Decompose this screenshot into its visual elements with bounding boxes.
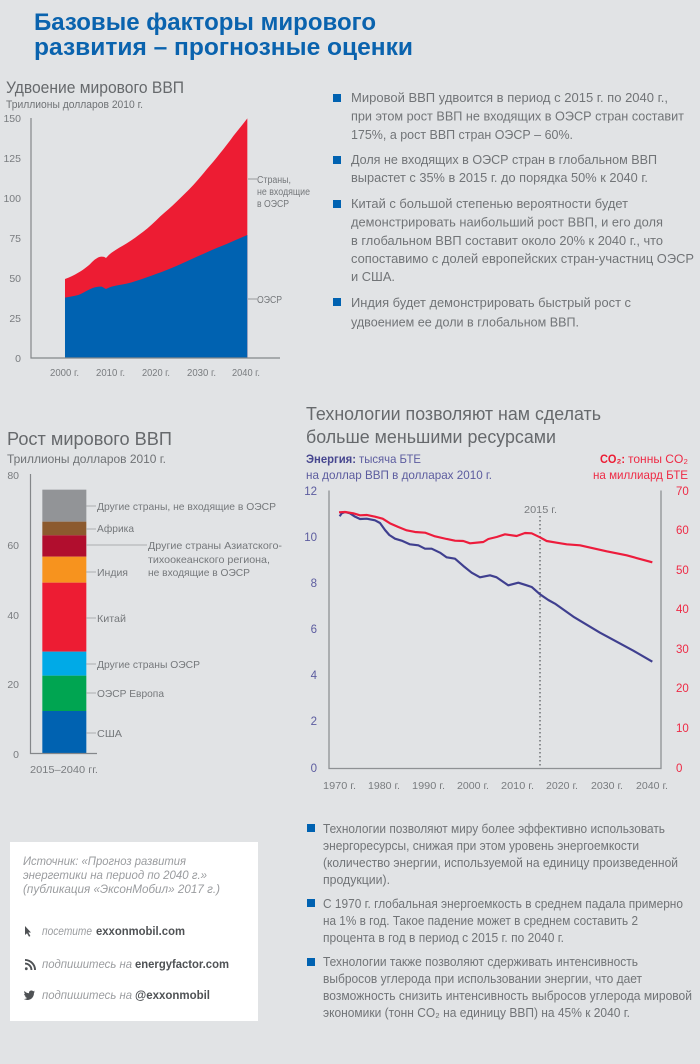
y axis labels: 80 (7, 470, 19, 482)
x axis labels: 2010 г. (501, 780, 534, 792)
heading: technology (306, 404, 601, 447)
panel: source and links (10, 842, 258, 1021)
subtitle: units: Триллионы долларов 2010 г. (7, 452, 166, 466)
right y axis labels: 60 (676, 525, 689, 537)
leader lines and segment labels: Другие страны ОЭСР (97, 659, 200, 671)
right y axis labels: 40 (676, 604, 689, 616)
x axis labels: 2040 г. (232, 368, 260, 379)
bullet 2: на 1% в год. Такое падение может в среднем составить 2 (323, 914, 638, 928)
y axis labels: 20 (7, 679, 19, 691)
title: Базовые факторы мирового (34, 9, 376, 36)
left y axis labels: 0 (311, 763, 317, 775)
source note: Источник: «Прогноз развития (23, 856, 186, 868)
x axis labels: 1980 г. (368, 780, 400, 792)
source note (23, 856, 220, 896)
y axis labels: 0 (13, 749, 19, 761)
y axis labels: 25 (9, 313, 21, 325)
right y axis labels (676, 486, 689, 775)
bullet 3: в глобальном ВВП составит около 20% к 2040 г., что (351, 233, 663, 248)
axes (30, 474, 97, 754)
right y axis labels: 10 (676, 723, 689, 735)
link: energy factor: energyfactor.com (135, 959, 229, 971)
x axis labels: 2010 г. (96, 368, 125, 379)
legend: energy axis title (306, 452, 492, 482)
area: non-OECD countries (65, 118, 247, 358)
panel: technology line chart (304, 404, 689, 792)
text block: GDP bullets (333, 90, 694, 330)
right y axis labels: 30 (676, 644, 689, 656)
panel: GDP doubling area chart (3, 78, 310, 379)
bullet 1 (333, 90, 684, 142)
bullet 3: демонстрировать наибольший рост ВВП, и его доля (351, 214, 663, 230)
x axis labels: 1990 г. (412, 780, 445, 792)
link: twitter (24, 990, 210, 1002)
y axis labels: 0 (15, 353, 21, 365)
right y axis labels: 0 (676, 763, 682, 775)
y axis labels (3, 113, 21, 365)
legend: energy axis title: на доллар ВВП в долларах 2010 г. (306, 468, 492, 482)
left y axis labels: 4 (311, 670, 318, 682)
heading: technology: Технологии позволяют нам сделать (306, 404, 601, 424)
leader lines and segment labels: Другие страны Азиатского- (148, 540, 283, 552)
y axis labels: 75 (9, 233, 21, 245)
x axis labels (50, 368, 260, 379)
leader lines and segment labels: Индия (97, 567, 128, 579)
area: OECD countries (65, 235, 247, 358)
x axis labels: 2020 г. (546, 780, 578, 792)
x axis labels: 2040 г. (636, 780, 668, 792)
heading: GDP doubling: Удвоение мирового ВВП (6, 78, 184, 97)
label: non-OECD: не входящие (257, 187, 310, 198)
left y axis labels (304, 486, 318, 775)
source note: энергетики на период по 2040 г.» (23, 870, 207, 882)
legend: energy axis title: Энергия: (306, 452, 356, 466)
label: non-OECD: Страны, (257, 175, 291, 186)
x axis labels (323, 780, 668, 792)
legend: CO2 axis title (593, 452, 688, 482)
bullet 3: Китай с большой степенью вероятности будет (351, 196, 628, 211)
bullet 1: при этом рост ВВП не входящих в ОЭСР стран составит (351, 108, 684, 124)
left y axis labels: 12 (304, 486, 317, 498)
line: energy intensity (340, 512, 652, 662)
link: twitter: подпишитесь на (42, 990, 132, 1002)
label: OECD: ОЭСР (257, 295, 282, 306)
bullet 1 (307, 822, 678, 887)
x axis labels: 2000 г. (457, 780, 489, 792)
bullet 3 (307, 955, 692, 1020)
title (34, 9, 413, 61)
label: OECD (248, 295, 282, 306)
right y axis labels: 50 (676, 565, 689, 577)
leader lines and segment labels: тихоокеанского региона, (148, 554, 270, 566)
bullet 4: удвоением ее доли в глобальном ВВП. (351, 314, 579, 330)
link: website: exxonmobil.com (96, 926, 185, 938)
leader lines and segment labels: Китай (97, 613, 126, 625)
legend: energy axis title: тысяча БТЕ (359, 452, 421, 466)
x axis labels: 2030 г. (187, 368, 216, 379)
bullet 2: Доля не входящих в ОЭСР стран в глобальном ВВП (351, 152, 657, 167)
y axis labels: 100 (3, 193, 21, 205)
axes (31, 118, 280, 358)
bullet 2: вырастет с 35% в 2015 г. до порядка 50% к 2040 г. (351, 170, 648, 185)
y axis labels: 50 (9, 273, 21, 285)
subtitle: units: Триллионы долларов 2010 г. (6, 99, 143, 111)
right y axis labels: 70 (676, 486, 689, 498)
bullet 1: Мировой ВВП удвоится в период с 2015 г. по 2040 г., (351, 90, 668, 105)
bullet 3: экономики (тонн CO₂ на единицу ВВП) на 45% к 2040 г. (323, 1006, 630, 1020)
leader lines and segment labels (86, 501, 283, 740)
right y axis labels: 20 (676, 683, 689, 695)
source note: (публикация «ЭксонМобил» 2017 г.) (23, 884, 220, 896)
label: non-OECD (248, 175, 310, 210)
y axis labels: 150 (3, 113, 21, 125)
bullet 2 (307, 897, 683, 945)
x axis label: 2015–2040 гг. (30, 764, 98, 776)
legend: CO2 axis title: CO₂: (600, 452, 625, 466)
bullet 4: Индия будет демонстрировать быстрый рост с (351, 295, 631, 310)
marker: 2015: 2015 г. (524, 504, 557, 516)
link: energy factor: подпишитесь на (42, 959, 132, 971)
x axis labels: 2030 г. (591, 780, 623, 792)
bullet 3 (333, 196, 694, 284)
panel: GDP growth stacked bar (7, 429, 283, 776)
link: twitter: @exxonmobil (135, 990, 210, 1002)
y axis labels: 125 (3, 153, 21, 165)
left y axis labels: 2 (311, 716, 317, 728)
x axis labels: 2000 г. (50, 368, 79, 379)
bullet 2: процента в год в период с 2015 г. по 2040 г. (323, 931, 564, 945)
x axis labels: 1970 г. (323, 780, 356, 792)
leader lines and segment labels: Другие страны, не входящие в ОЭСР (97, 501, 276, 513)
bullet 3: сопоставимо с долей европейских стран-участниц ОЭСР (351, 251, 694, 266)
bullet 2: С 1970 г. глобальная энергоемкость в среднем падала примерно (323, 897, 683, 911)
link: energy factor (25, 959, 229, 971)
x axis labels: 2020 г. (142, 368, 170, 379)
bullet 3: выбросов углерода при использовании энергии, что дает (323, 972, 642, 986)
icon: rss (25, 959, 36, 970)
heading: technology: больше меньшими ресурсами (306, 427, 556, 447)
leader lines and segment labels: США (97, 728, 122, 740)
legend: CO2 axis title: на миллиард БТЕ (593, 468, 688, 482)
bullet 4 (333, 295, 631, 330)
bullet 3: Технологии также позволяют сдерживать интенсивность (323, 955, 638, 969)
title: развития – прогнозные оценки (34, 34, 413, 61)
axes (329, 490, 661, 768)
text block: technology bullets (307, 822, 692, 1020)
bullet 1: (количество энергии, используемой на единицу произведенной (323, 856, 678, 870)
y axis labels: 60 (7, 540, 19, 552)
bullet 1: энергоресурсы, снижая при этом уровень энергоемкости (323, 839, 639, 853)
left y axis labels: 6 (311, 624, 317, 636)
bullet 2 (333, 152, 657, 185)
left y axis labels: 10 (304, 532, 317, 544)
line: CO2 intensity (339, 512, 652, 562)
leader lines and segment labels: не входящие в ОЭСР (148, 567, 250, 579)
icon: cursor (25, 926, 31, 937)
icon: twitter bird (24, 990, 35, 1000)
leader lines and segment labels: Африка (97, 523, 134, 535)
link: website (25, 926, 185, 938)
bullet 3: и США. (351, 269, 395, 284)
y axis labels (7, 470, 19, 761)
bullet 1: продукции). (323, 873, 390, 887)
leader lines and segment labels: ОЭСР Европа (97, 688, 164, 700)
left y axis labels: 8 (311, 578, 317, 590)
bullet 3: возможность снизить интенсивность выбросов углерода мировой (323, 989, 692, 1003)
bullet 1: Технологии позволяют миру более эффективно использовать (323, 822, 665, 836)
link: website: посетите (42, 926, 92, 938)
stacked bar (42, 490, 86, 753)
label: non-OECD: в ОЭСР (257, 199, 289, 210)
bullet 1: 175%, а рост ВВП стран ОЭСР – 60%. (351, 127, 573, 142)
legend: CO2 axis title: тонны CO₂ (628, 452, 688, 466)
heading: GDP growth: Рост мирового ВВП (7, 429, 172, 449)
y axis labels: 40 (7, 610, 19, 622)
